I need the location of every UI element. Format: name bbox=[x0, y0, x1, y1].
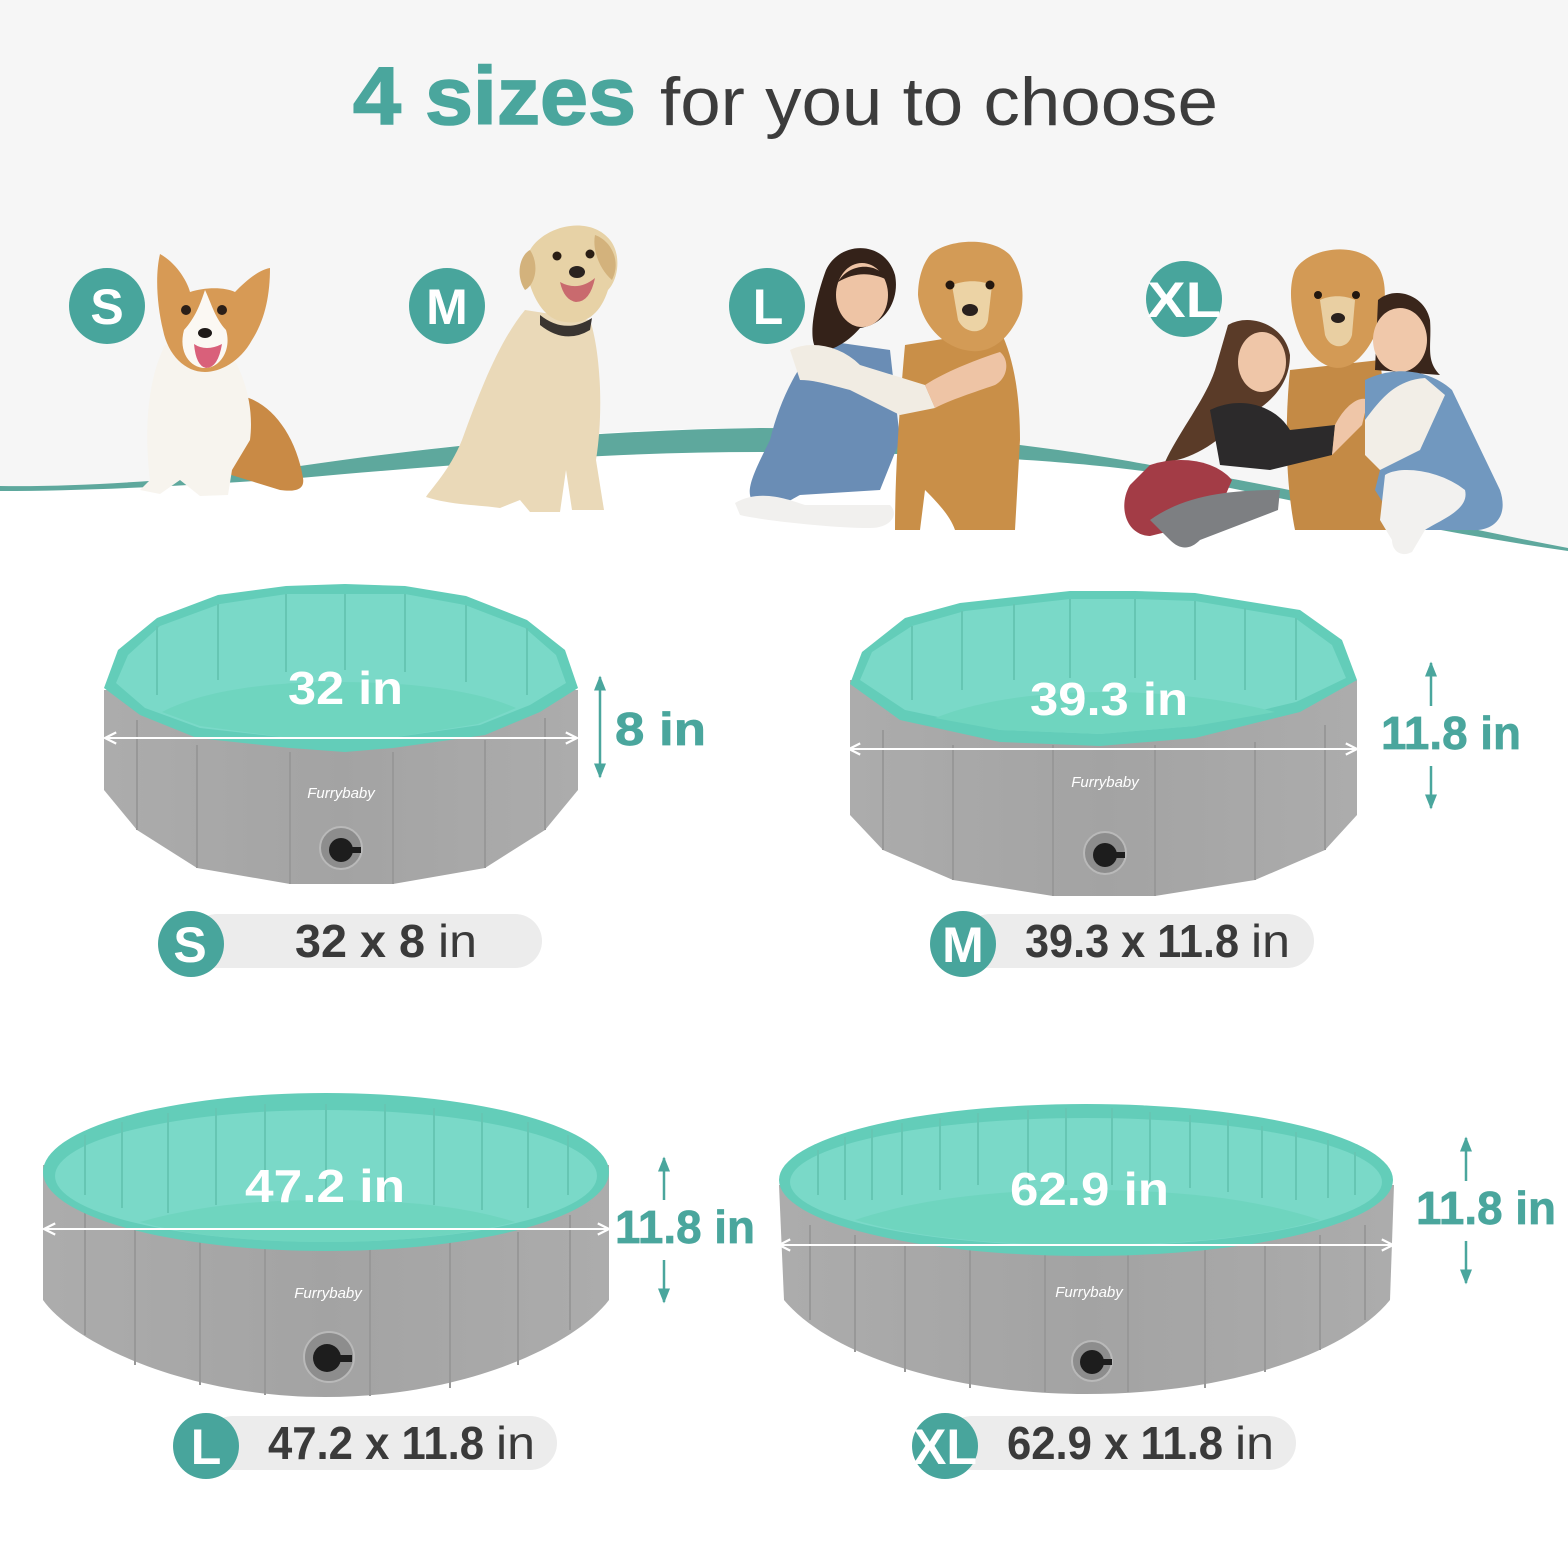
pool: S bbox=[104, 584, 578, 884]
diameter arrow bbox=[105, 737, 577, 739]
drain valve bbox=[304, 1332, 354, 1382]
badge: M bbox=[409, 268, 485, 344]
badge: L bbox=[729, 268, 805, 344]
size pill: M bbox=[930, 911, 1314, 977]
size pill: S: S bbox=[173, 917, 207, 973]
badge: XL: XL bbox=[1147, 272, 1221, 328]
drain valve bbox=[1072, 1341, 1112, 1381]
size pill: L: L bbox=[191, 1419, 221, 1475]
pool: M bbox=[849, 591, 1357, 896]
size pill: M: in bbox=[1251, 915, 1290, 967]
drain valve bbox=[1084, 832, 1126, 874]
diameter label: 47.2 in bbox=[245, 1160, 405, 1212]
diameter label: 39.3 in bbox=[1030, 673, 1188, 725]
logo: Furrybaby bbox=[1071, 774, 1140, 791]
badge: S bbox=[69, 268, 145, 344]
pool: XL bbox=[779, 1104, 1394, 1394]
diameter arrow bbox=[779, 1244, 1393, 1246]
height dimension: S bbox=[600, 677, 706, 777]
diameter label: 62.9 in bbox=[1010, 1163, 1169, 1215]
diameter label: 32 in bbox=[288, 662, 403, 714]
pool: L bbox=[43, 1093, 609, 1397]
teal wave band bbox=[0, 428, 1568, 551]
diameter arrow bbox=[44, 1228, 609, 1230]
size pill: L bbox=[173, 1413, 557, 1479]
title: for you to choose bbox=[660, 64, 1218, 140]
badge: M: M bbox=[426, 279, 468, 335]
background: pale grey upper area bbox=[0, 0, 1568, 548]
size pill: M: 39.3 x 11.8 bbox=[1025, 915, 1239, 967]
logo: Furrybaby bbox=[307, 785, 376, 802]
badge: L: L bbox=[753, 279, 783, 335]
height dimension: XL: 11.8 in bbox=[1416, 1182, 1556, 1234]
height dimension: M: 11.8 in bbox=[1381, 707, 1521, 759]
size pill: XL bbox=[912, 1413, 1296, 1479]
height dimension: L: 11.8 in bbox=[615, 1201, 755, 1253]
size pill: L: in bbox=[496, 1417, 535, 1469]
drain valve bbox=[320, 827, 362, 869]
size pill: XL: in bbox=[1235, 1417, 1274, 1469]
size pill: S: in bbox=[438, 915, 477, 967]
diameter arrow bbox=[849, 748, 1357, 750]
size pill: S: 32 x 8 bbox=[295, 915, 425, 967]
photo: two girls with golden dog (XL) bbox=[1124, 249, 1503, 554]
title: 4 sizes bbox=[353, 51, 636, 142]
size pill: S bbox=[158, 911, 542, 977]
badge: S: S bbox=[90, 279, 124, 335]
badge: XL bbox=[1146, 261, 1222, 337]
logo: Furrybaby bbox=[1055, 1284, 1124, 1301]
photo: golden retriever bbox=[426, 226, 617, 512]
height dimension: S: 8 in bbox=[615, 703, 706, 755]
photo: corgi bbox=[140, 254, 303, 496]
size pill: XL: XL bbox=[913, 1419, 977, 1475]
photo: girl with golden dog (L) bbox=[735, 242, 1023, 530]
title bbox=[353, 51, 1218, 142]
size pill: XL: 62.9 x 11.8 bbox=[1007, 1417, 1223, 1469]
size pill: L: 47.2 x 11.8 bbox=[268, 1417, 484, 1469]
size pill: M: M bbox=[942, 917, 984, 973]
logo: Furrybaby bbox=[294, 1285, 363, 1302]
